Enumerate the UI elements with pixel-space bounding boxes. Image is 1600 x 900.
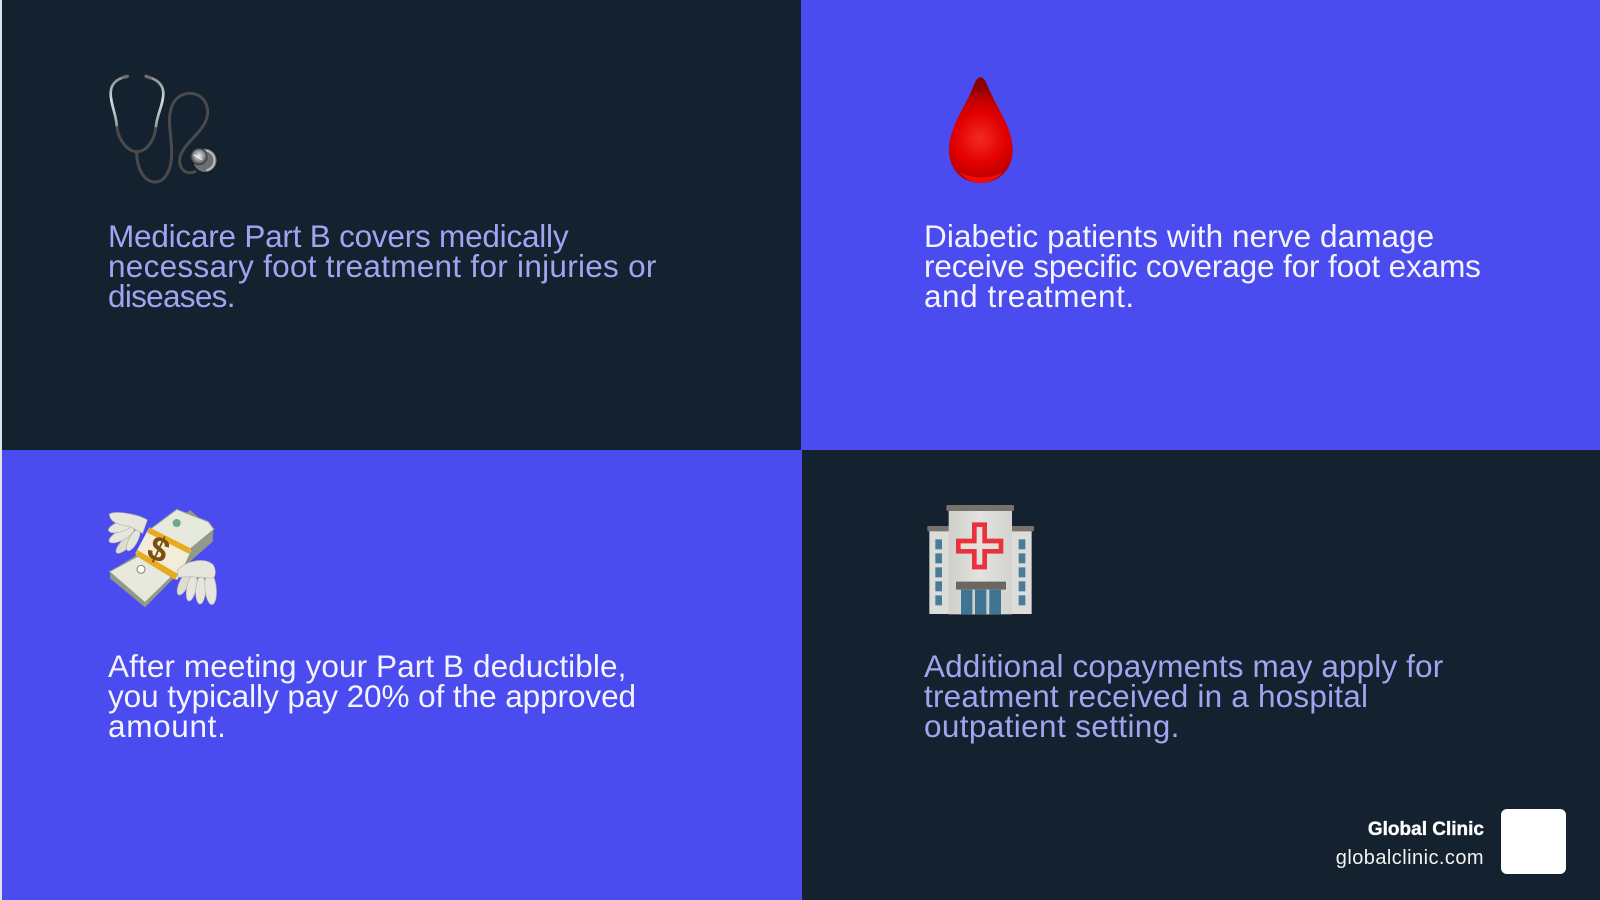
panel: Part B coverage xyxy=(2,0,801,450)
text: copayments: Additional copayments may apply for xyxy=(924,648,1443,684)
logo placeholder square xyxy=(1501,809,1566,874)
footer website: globalclinic.com xyxy=(1336,847,1484,869)
text: Part B coverage xyxy=(108,218,657,314)
text: Part B coverage: necessary foot treatment for injuries or xyxy=(108,248,657,284)
text: deductible: amount. xyxy=(108,708,227,744)
icon: money with wings xyxy=(107,509,218,607)
text: diabetic coverage xyxy=(924,218,1481,314)
right wing xyxy=(174,560,218,605)
left edge strip xyxy=(0,0,2,900)
panel: deductible xyxy=(2,450,802,900)
text: Part B coverage: diseases. xyxy=(108,278,235,314)
panel: copayments xyxy=(802,450,1600,900)
icon: blood drop xyxy=(949,77,1013,183)
text: diabetic coverage: receive specific coverage for foot exams xyxy=(924,248,1481,284)
text: diabetic coverage: and treatment. xyxy=(924,278,1135,314)
text: Part B coverage: Medicare Part B covers medically xyxy=(108,218,568,254)
text: copayments: treatment received in a hospital xyxy=(924,678,1368,714)
left wing xyxy=(107,513,147,556)
text: deductible xyxy=(108,648,636,744)
icon: stethoscope xyxy=(111,76,217,182)
text: diabetic coverage: Diabetic patients with nerve damage xyxy=(924,218,1434,254)
icon: hospital xyxy=(927,505,1034,614)
text: copayments: outpatient setting. xyxy=(924,708,1180,744)
footer brand name: Global Clinic xyxy=(1368,819,1484,840)
icon: money with wings: $ xyxy=(142,529,175,571)
text: deductible: After meeting your Part B deductible, xyxy=(108,648,626,684)
text: deductible: you typically pay 20% of the approved xyxy=(108,678,636,714)
text: copayments xyxy=(924,648,1443,744)
panel: diabetic coverage xyxy=(801,0,1600,450)
